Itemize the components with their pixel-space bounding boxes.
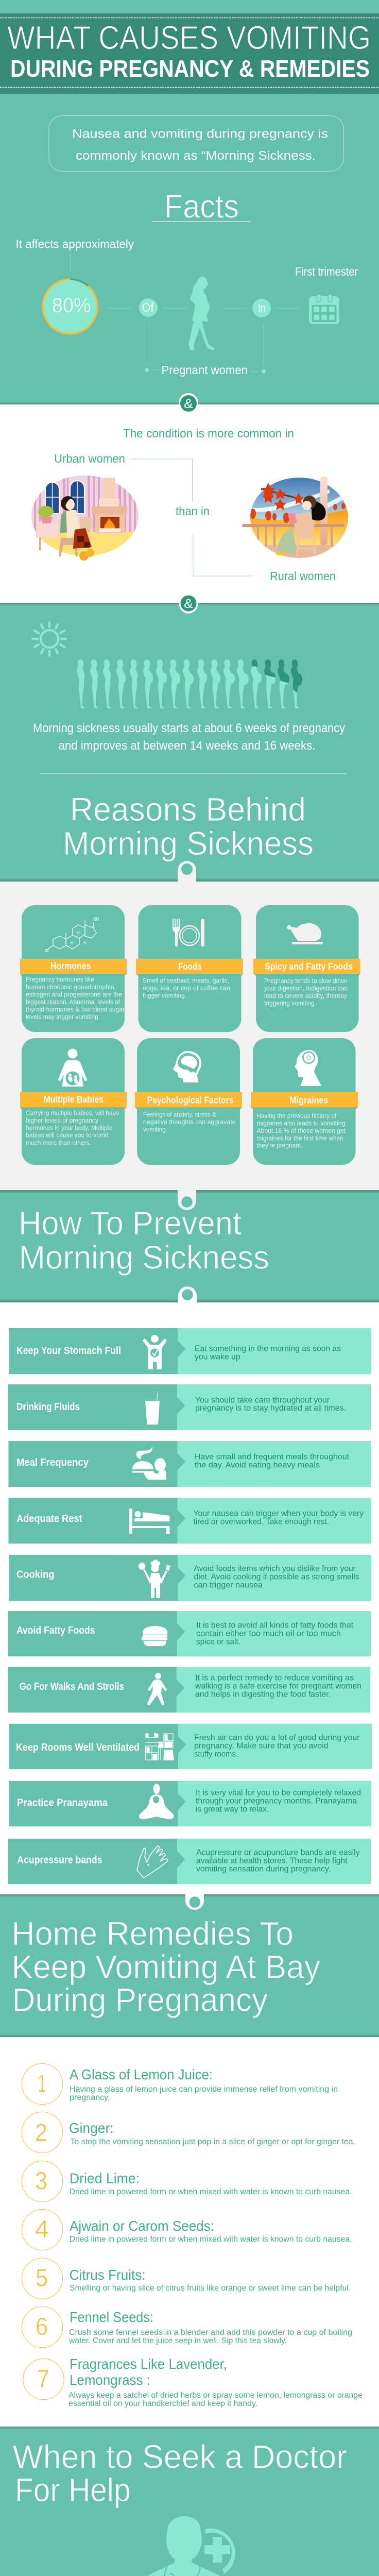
row: keep rooms well ventilated: [9, 1724, 372, 1769]
remedy 1: lemon juice: Having a glass of lemon juice can provide immense relief from vomiting in: [70, 2085, 338, 2094]
card: hormones: human chorionic gonadotrophin,: [26, 983, 116, 991]
card: psychological factors: [143, 1051, 236, 1133]
card: hormones: biggest reason. Abnormal levels of: [26, 998, 120, 1006]
icon: burger: [142, 1626, 167, 1646]
card: migraines: About 16 % of those women get: [256, 1127, 346, 1134]
connector tab: [185, 1894, 204, 1910]
card: multiple babies: [26, 1049, 119, 1146]
remedy 7: fragrances: Fragrances Like Lavender,: [70, 2356, 227, 2372]
remedy 7: fragrances: 7: [37, 2365, 49, 2393]
remedy 1: lemon juice: A Glass of Lemon Juice:: [70, 2066, 213, 2082]
card: hormones: Hormones: [50, 961, 91, 971]
remedy 2: ginger: 2: [35, 2120, 47, 2146]
card: spicy and fatty foods: lead to severe acidity, thereby: [264, 992, 347, 999]
row: cooking: diet. Avoid cooking if possible as strong smells: [194, 1572, 359, 1581]
chart: pregnancy week silhouettes: [77, 659, 302, 708]
heading: home remedies: Keep Vomiting At Bay: [11, 1948, 320, 1985]
icon: sun: [32, 622, 66, 656]
remedy 2: ginger: To stop the vomiting sensation just pop in a slice of ginger or opt for ginger tea.: [71, 2138, 355, 2146]
row: adequate rest: Your nausea can trigger when your body is very: [194, 1510, 364, 1518]
row: cooking: [9, 1555, 371, 1601]
card: psychological factors: Feelings of anxiety, stress &: [143, 1111, 216, 1118]
icon: walking person: [147, 1673, 167, 1705]
icon: head with brain: [173, 1051, 201, 1082]
icon: plate and cutlery: [173, 919, 204, 947]
title banner: [0, 13, 379, 94]
badge: of: [139, 298, 158, 317]
card: spicy and fatty foods: Spicy and Fatty Foods: [265, 961, 353, 972]
card: migraines: migranes also leads to vomitting.: [256, 1119, 347, 1127]
row: drinking fluids: You should take care throughout your: [195, 1396, 330, 1405]
card: hormones: thyroid hormones & low blood sugar: [26, 1005, 125, 1013]
intro callout: commonly known as “Morning Sickness.: [76, 149, 316, 163]
panel: prevention tips: [8, 1328, 372, 1884]
icon: molecule: [45, 917, 99, 952]
remedy 2: ginger: [22, 2112, 355, 2153]
row: practice pranayama: is great way to relax.: [196, 1805, 269, 1814]
card: foods: Foods: [178, 961, 202, 972]
row: avoid fatty foods: Avoid Fatty Foods: [16, 1625, 95, 1636]
row: adequate rest: tired or overworked. Take enough rest.: [194, 1518, 329, 1527]
remedy 1: lemon juice: [22, 2063, 338, 2105]
heading: when to seek a doctor: For Help: [15, 2471, 131, 2509]
icon: glass with straw: [145, 1391, 160, 1425]
remedy 7: fragrances: Lemongrass :: [70, 2372, 150, 2388]
row: acupressure bands: [8, 1839, 371, 1884]
panel: timeline of morning sickness: [32, 622, 345, 753]
heading: facts: Facts: [164, 188, 239, 225]
text: timeline description: Morning sickness usually starts at about 6 weeks of pregnancy: [33, 721, 345, 735]
remedy 4: ajwain seeds: Ajwain or Carom Seeds:: [70, 2218, 214, 2234]
icon: meditating figure: [139, 1784, 174, 1819]
connector badge: ampersand top: &: [184, 397, 193, 411]
text: timeline description: and improves at between 14 weeks and 16 weeks.: [59, 739, 315, 753]
row: drinking fluids: pregnancy is to stay hydrated at all times.: [195, 1404, 346, 1413]
remedy 4: ajwain seeds: Dried lime in powered form or when mixed with water is known to curb nausea.: [70, 2235, 352, 2244]
panel: facts flow: [15, 238, 358, 377]
connector tab: [178, 1286, 197, 1303]
card: migraines: [256, 1050, 347, 1149]
row: practice pranayama: [9, 1781, 371, 1826]
heading: reasons behind morning sickness: [63, 791, 314, 862]
row: go for walks and strolls: It is a perfect remedy to reduce vomiting as: [195, 1673, 354, 1682]
chart: 80 percent donut: [43, 279, 97, 334]
row: keep rooms well ventilated: pregnancy. Make sure that you avoid: [194, 1741, 329, 1750]
row: go for walks and strolls: [8, 1667, 370, 1713]
card: hormones: [26, 917, 125, 1021]
card: psychological factors: negative thoughts can aggravate: [143, 1118, 236, 1126]
card: hormones: levels may trigger vomiting.: [26, 1013, 100, 1021]
remedy 1: lemon juice: 1: [38, 2071, 46, 2098]
icon: molecule: OH: [93, 917, 99, 922]
icon: hand: [137, 1846, 168, 1878]
remedy 2: ginger: Ginger:: [69, 2120, 114, 2136]
row: go for walks and strolls: walking is a safe exercise for pregnant women: [195, 1682, 361, 1690]
remedy 1: lemon juice: pregnancy.: [70, 2093, 110, 2102]
remedy 6: fennel seeds: Fennel Seeds:: [70, 2309, 153, 2325]
row: acupressure bands: Acupressure bands: [17, 1855, 102, 1866]
remedy 3: dried lime: 3: [35, 2167, 47, 2195]
heading: when to seek a doctor: When to Seek a Doctor: [12, 2438, 347, 2476]
remedy 7: fragrances: essential oil on your handkerchief and keep it handy.: [68, 2399, 257, 2408]
row: acupressure bands: Acupressure or acupuncture bands are easily: [196, 1848, 359, 1857]
card: hormones: Pregnancy hormones like: [26, 976, 94, 984]
icon: roast turkey: [287, 923, 323, 944]
row: acupressure bands: available at health stores. These help fight: [196, 1856, 348, 1865]
remedy 7: fragrances: [23, 2356, 363, 2408]
intro callout: Nausea and vomiting during pregnancy is: [72, 127, 328, 141]
text: urban women: Urban women: [54, 452, 125, 465]
text: rural women: Rural women: [270, 569, 336, 583]
row: keep your stomach full: Keep Your Stomach Full: [16, 1345, 121, 1357]
card: migraines: Migraines: [289, 1095, 329, 1106]
heading: reasons behind morning sickness: Reasons Behind: [70, 791, 306, 828]
card: foods: [143, 919, 230, 999]
icon: molecule: H: [83, 941, 87, 945]
badge: in: [252, 299, 271, 317]
card: migraines: they're pregnant.: [256, 1142, 303, 1149]
row: cooking: Cooking: [16, 1569, 55, 1581]
card: multiple babies: hormones in your body. Multiple: [26, 1124, 112, 1131]
card: spicy and fatty foods: triggering vomiting.: [264, 999, 316, 1007]
row: drinking fluids: [8, 1384, 371, 1430]
remedy 6: fennel seeds: Crush some fennel seeds in a blender and add this powder to a cup of boiling: [69, 2328, 352, 2337]
card: multiple babies: much more than others.: [26, 1139, 91, 1146]
row: cooking: Avoid foods items which you dislike from your: [194, 1564, 356, 1573]
badge: of: Of: [142, 301, 154, 315]
row: keep your stomach full: [9, 1328, 371, 1374]
icon: furniture: [145, 1733, 174, 1760]
card: foods: eggs, tea, or cup of coffee can: [143, 984, 230, 992]
row: adequate rest: [8, 1498, 371, 1544]
card: migraines: Having the previous history of: [256, 1112, 336, 1120]
remedy 5: citrus fruits: [22, 2258, 351, 2299]
text: first trimester: First trimester: [295, 265, 358, 278]
card: spicy and fatty foods: your digestion. Indigestion can: [264, 985, 348, 992]
card: spicy and fatty foods: Pregnancy tends to slow down: [264, 977, 347, 985]
heading: reasons behind morning sickness: Morning Sickness: [63, 825, 314, 862]
row: avoid fatty foods: contain either too much oil or too much: [196, 1629, 341, 1638]
heading: when to seek a doctor: [12, 2438, 347, 2509]
row: meal frequency: [8, 1441, 371, 1487]
row: practice pranayama: Practice Pranayama: [17, 1798, 108, 1809]
icon: doctor with medical cross: [144, 2516, 235, 2576]
card: spicy and fatty foods: [264, 923, 353, 1007]
remedy 6: fennel seeds: 6: [36, 2313, 48, 2341]
connector badge: ampersand bottom: &: [184, 597, 193, 611]
heading: how to prevent morning sickness: [19, 1205, 269, 1276]
row: keep rooms well ventilated: Keep Rooms Well Ventilated: [16, 1742, 140, 1753]
intro callout: [49, 116, 343, 171]
icon: pregnant woman silhouette: [188, 277, 215, 350]
remedy 5: citrus fruits: 5: [36, 2265, 48, 2292]
row: meal frequency: Have small and frequent meals throughout: [195, 1453, 350, 1462]
row: acupressure bands: vomiting sensation during pregnancy.: [196, 1865, 331, 1873]
remedy 3: dried lime: Dried lime in powered form or when mixed with water is known to curb nausea.: [70, 2188, 352, 2196]
icon: chef: [139, 1560, 170, 1598]
icon: child with check: [143, 1335, 167, 1369]
icon: calendar: [309, 294, 339, 324]
row: go for walks and strolls: Go For Walks And Strolls: [20, 1681, 124, 1692]
row: meal frequency: the day. Avoid eating heavy meals: [195, 1461, 320, 1470]
illustration: rural woman on porch: [242, 477, 350, 561]
row: go for walks and strolls: and helps in digesting the food faster.: [195, 1690, 331, 1699]
row: adequate rest: Adequate Rest: [16, 1513, 82, 1524]
remedy 5: citrus fruits: Citrus Fruits:: [70, 2267, 146, 2283]
panel: urban vs rural: [31, 427, 350, 583]
row: keep your stomach full: Eat something in the morning as soon as: [195, 1345, 341, 1353]
icon: mother with twins: [58, 1049, 87, 1087]
heading: how to prevent morning sickness: How To Prevent: [19, 1205, 242, 1242]
icon: bed: [129, 1509, 170, 1534]
chart: 80 percent donut: 80%: [52, 294, 91, 317]
row: cooking: can trigger nausea: [194, 1581, 263, 1589]
row: keep rooms well ventilated: stuffy rooms.: [194, 1750, 238, 1758]
panel: remedies list: [22, 2063, 363, 2408]
remedy 6: fennel seeds: [22, 2307, 352, 2348]
row: avoid fatty foods: [8, 1611, 371, 1656]
row: avoid fatty foods: It is best to avoid all kinds of fatty foods that: [196, 1621, 354, 1630]
row: keep rooms well ventilated: Fresh air can do you a lot of good during your: [194, 1733, 360, 1742]
row: keep your stomach full: you wake up: [195, 1353, 240, 1362]
panel: reasons cards: [20, 905, 360, 1165]
remedy 3: dried lime: [22, 2161, 352, 2202]
row: practice pranayama: It is very vital for you to be completely relaxed: [196, 1788, 361, 1797]
icon: molecule: H: [71, 941, 74, 945]
heading: home remedies: Home Remedies To: [11, 1915, 294, 1952]
remedy 6: fennel seeds: water. Cover and let the juice seep in well. Sip this tea slowly.: [68, 2336, 287, 2345]
remedy 7: fragrances: Always keep a satchel of dried herbs or spray some lemon, lemongrass or orange: [68, 2391, 363, 2400]
card: hormones: estrogen and progesterone are the: [26, 991, 122, 998]
remedy 4: ajwain seeds: 4: [35, 2216, 49, 2243]
row: practice pranayama: through your pregnancy months. Pranayama: [196, 1797, 357, 1805]
row: drinking fluids: Drinking Fluids: [16, 1401, 80, 1413]
text: than in: than in: [176, 504, 210, 518]
card: psychological factors: Psychological Factors: [147, 1095, 234, 1106]
row: avoid fatty foods: spice or salt.: [196, 1637, 240, 1646]
text: pregnant women: Pregnant women: [162, 363, 248, 377]
card: foods: Smell of seafood, meats, garlic,: [143, 977, 229, 985]
illustration: urban woman by fireplace: [31, 474, 140, 561]
icon: waiter with cloche: [132, 1447, 166, 1480]
connector tab: [178, 861, 196, 882]
heading: home remedies: [11, 1915, 320, 2018]
text: timeline description: [33, 721, 345, 753]
remedy 4: ajwain seeds: [22, 2209, 352, 2250]
connector badge: ampersand top: [179, 393, 198, 413]
card: foods: trigger vomiting.: [143, 992, 186, 999]
badge: in: In: [258, 301, 266, 315]
icon: head with target: [295, 1050, 321, 1086]
card: multiple babies: Carrying multiple babies, will have: [26, 1109, 119, 1116]
connector badge: ampersand bottom: [179, 596, 198, 614]
icon: molecule: H: [77, 930, 80, 935]
heading: condition more common: The condition is more common in: [123, 427, 294, 440]
card: multiple babies: higher levels of pregnancy: [26, 1116, 98, 1124]
remedy 5: citrus fruits: Smelling or having slice of citrus fruits like orange or sweet lime can be helpful.: [70, 2284, 351, 2293]
heading: home remedies: During Pregnancy: [12, 1981, 268, 2018]
card: multiple babies: babies will cause you to vomit: [26, 1131, 108, 1139]
card: migraines: migraines for the first time when: [256, 1134, 343, 1142]
card: multiple babies: Multiple Babies: [43, 1094, 104, 1105]
card: psychological factors: vomiting.: [143, 1125, 167, 1133]
heading: how to prevent morning sickness: Morning Sickness: [19, 1239, 269, 1276]
text: it affects approximately: It affects approximately: [15, 238, 134, 251]
row: meal frequency: Meal Frequency: [16, 1457, 89, 1468]
remedy 3: dried lime: Dried Lime:: [70, 2171, 140, 2187]
connector tab: [178, 1190, 196, 1210]
